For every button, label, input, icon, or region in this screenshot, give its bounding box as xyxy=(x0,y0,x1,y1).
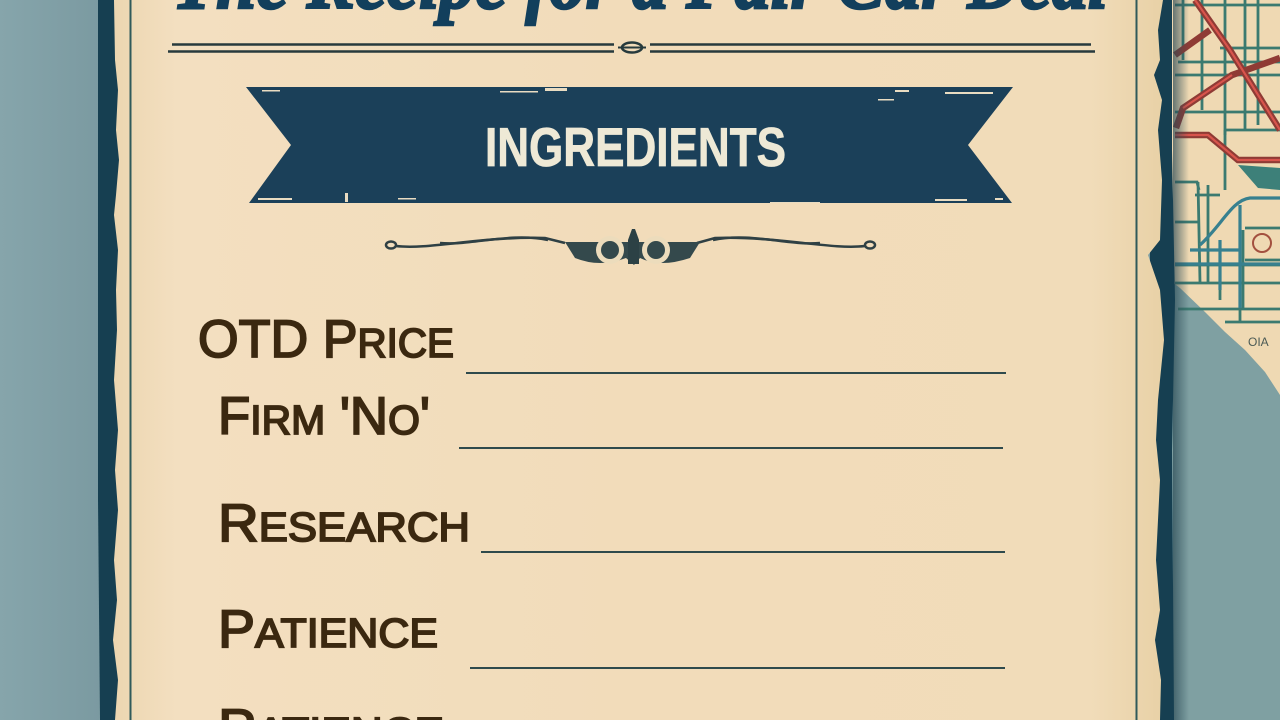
ingredient row: Firm No: FIRM 'NO' xyxy=(218,387,430,446)
card right torn edge xyxy=(1150,0,1175,720)
card inner frame xyxy=(130,0,1136,720)
ornament divider xyxy=(386,229,875,265)
map blue streets xyxy=(1175,198,1280,308)
paper right dark shadow xyxy=(1173,0,1189,720)
ingredient row: OTD Price: OTD PRICE xyxy=(198,310,454,369)
ingredient row: Research: RESEARCH xyxy=(218,494,470,553)
map park xyxy=(1238,165,1280,190)
ingredient row: Patience: PATIENCE xyxy=(218,600,438,659)
title divider xyxy=(168,42,1095,52)
card left torn edge xyxy=(98,0,120,720)
ingredients banner xyxy=(246,87,1013,203)
banner label: INGREDIENTS xyxy=(485,116,786,178)
map label: OIA xyxy=(1248,335,1269,349)
map red highways xyxy=(1175,0,1280,160)
banner wear marks xyxy=(258,88,1003,203)
background: left teal xyxy=(0,0,100,720)
map street grid xyxy=(1175,0,1280,322)
panel: road map xyxy=(1172,0,1280,395)
map symbol xyxy=(1253,234,1271,252)
background: right teal xyxy=(1170,280,1280,720)
